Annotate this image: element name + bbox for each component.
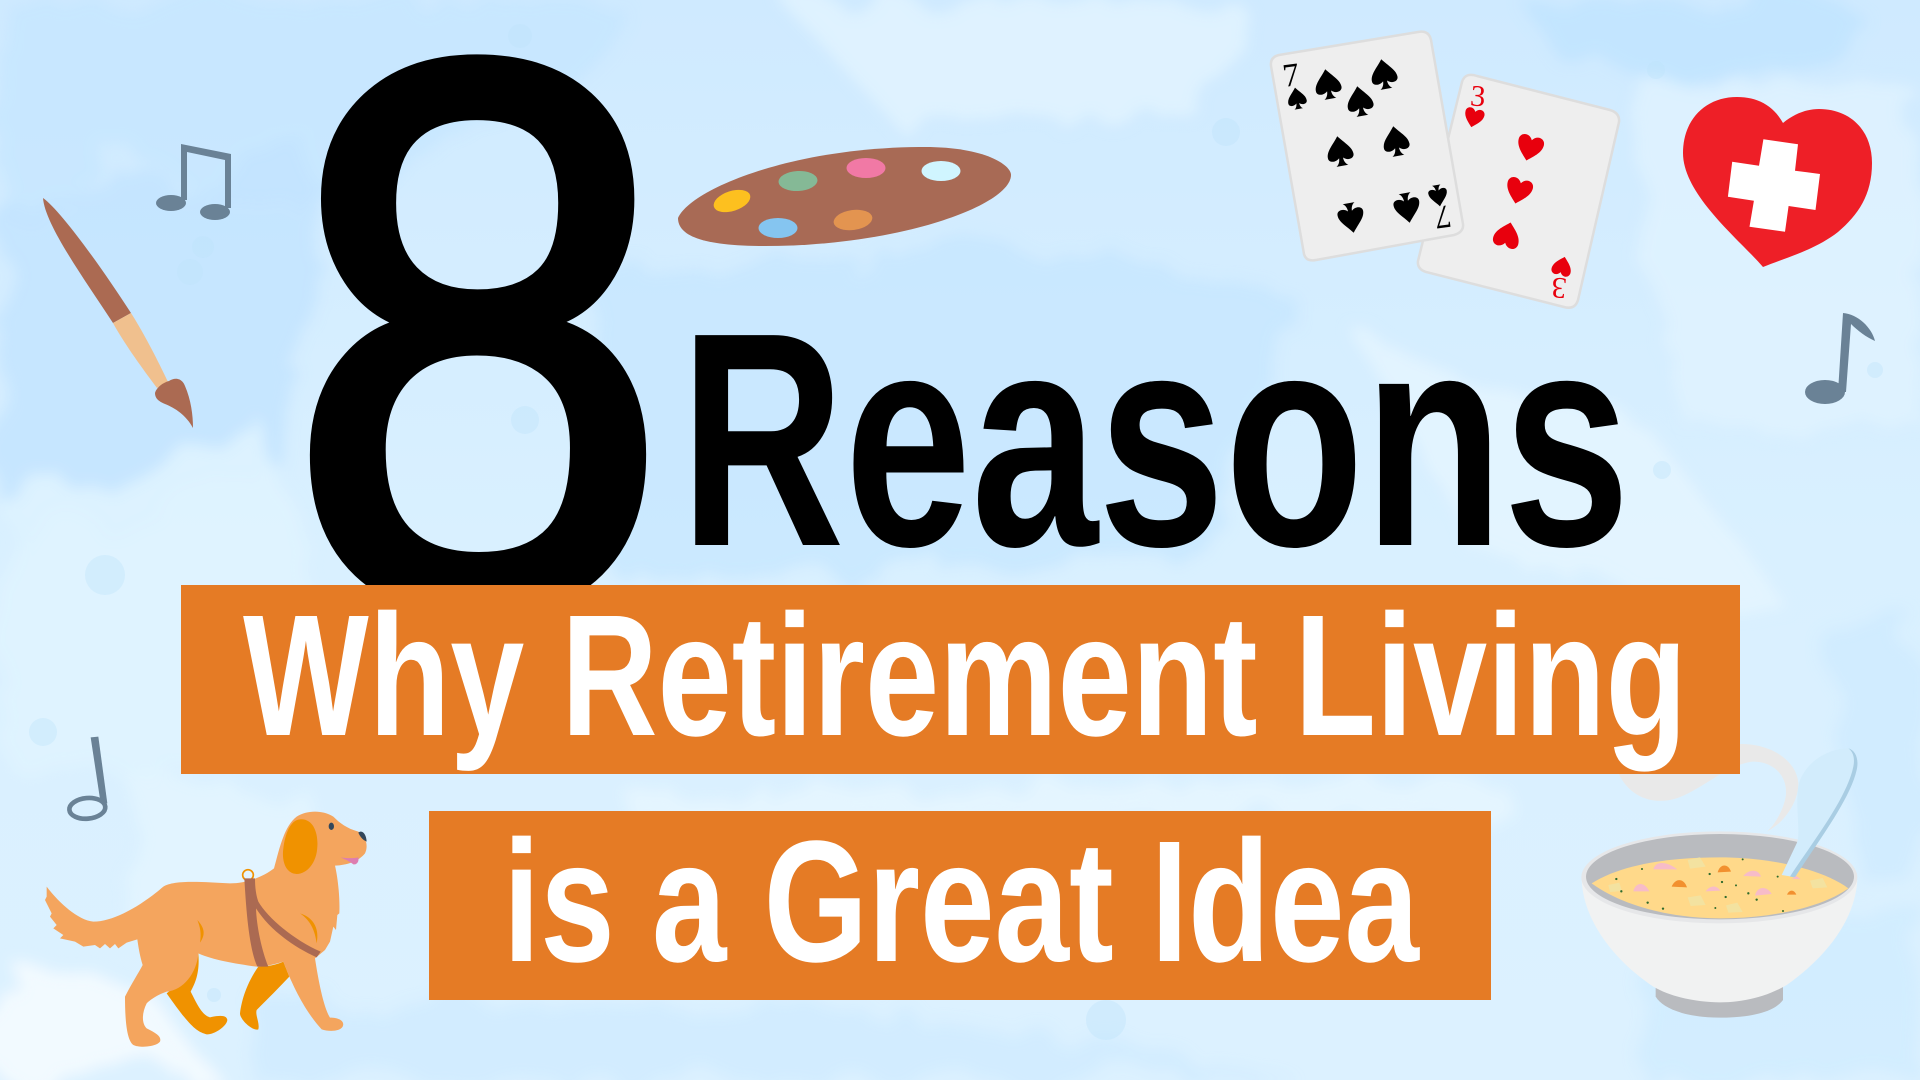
- icon: soup bowl with spoon: [1581, 748, 1857, 1018]
- icon: three of hearts card: 3: [1469, 79, 1487, 114]
- icon: half music note: [69, 737, 107, 820]
- icon: seven of spades card: 7: [1280, 57, 1302, 95]
- icon: guide dog with harness: [45, 812, 367, 1047]
- icon: paint brush: [43, 198, 193, 428]
- heading: Reasons: Reasons: [680, 269, 1630, 610]
- icon: seven of spades card: [1271, 32, 1463, 260]
- icon: beamed music notes: [156, 144, 231, 220]
- steam behind bowl: [1618, 744, 1798, 832]
- icon: eighth music note: [1805, 313, 1875, 404]
- icon: three of hearts card: [1418, 75, 1619, 308]
- icon: three of hearts card: 3: [1550, 270, 1568, 305]
- icon: seven of spades card: 7: [1432, 197, 1454, 235]
- banner: is a Great Idea: is a Great Idea: [503, 804, 1420, 998]
- icon: paint palette: [678, 147, 1011, 246]
- icon: heart with medical cross: [1683, 97, 1872, 267]
